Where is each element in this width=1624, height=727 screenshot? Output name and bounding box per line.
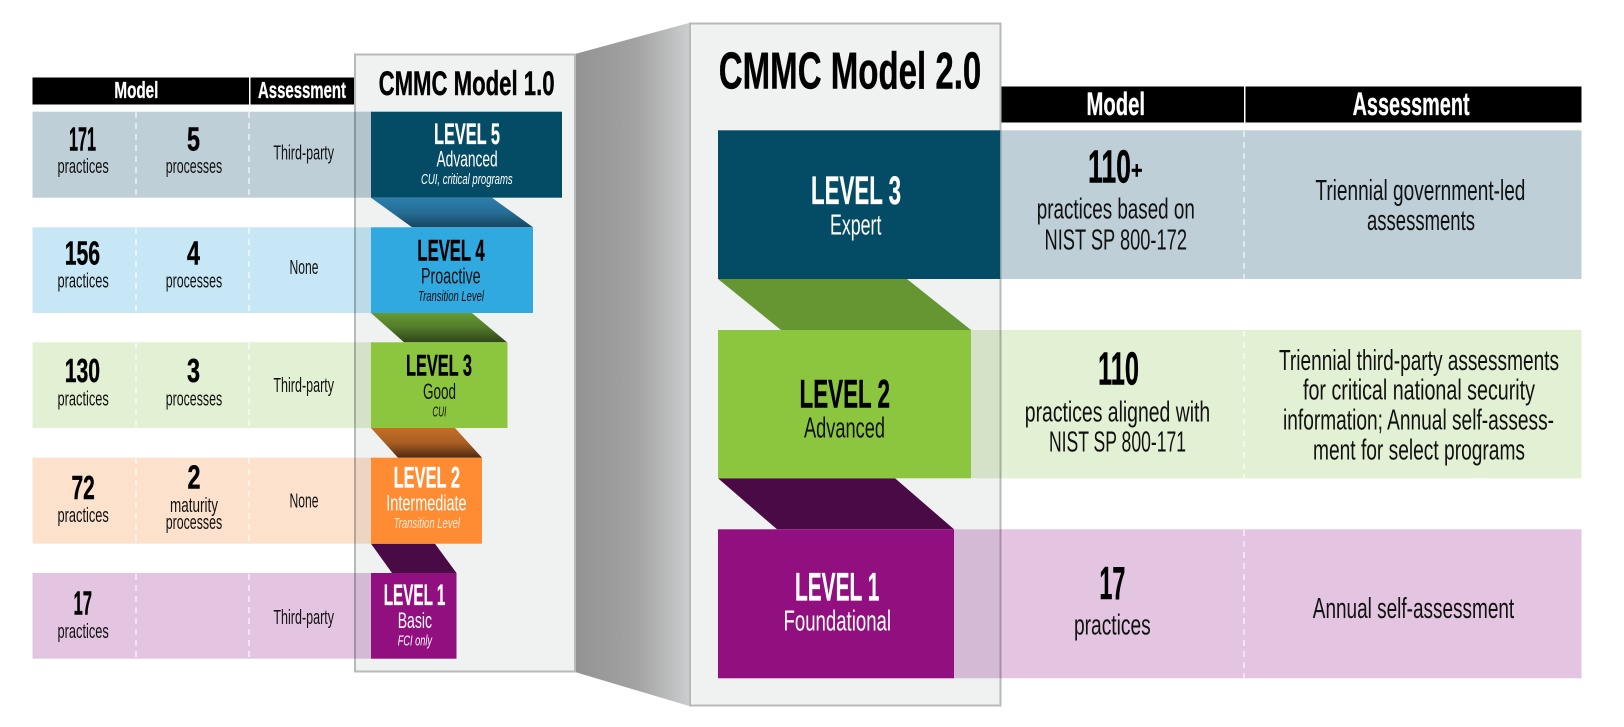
- row: 2.0 level 3 data: assessments: [1367, 205, 1475, 237]
- row: 1.0 level 5 data: processes: [166, 155, 222, 178]
- box: 1.0 level 4 proactive: Proactive: [421, 263, 481, 288]
- row: 1.0 level 4 data: processes: [166, 270, 222, 292]
- row: 2.0 level 1 data: 17: [1099, 557, 1125, 609]
- table header: model 2.0: Model: [1086, 86, 1145, 122]
- table header: model 1.0: Assessment: [258, 77, 346, 103]
- connector: 1.0 level 4 to level 3: [371, 313, 507, 342]
- row: 1.0 level 1 data: Third-party: [273, 606, 334, 629]
- row: 1.0 level 1 data: [32, 573, 372, 659]
- box: 1.0 level 5 advanced: LEVEL 5: [434, 118, 500, 151]
- table header: model 1.0: [32, 77, 354, 104]
- box: 1.0 level 1 basic: LEVEL 1: [384, 579, 445, 612]
- row: 2.0 level 3 data: [1000, 130, 1582, 279]
- box: 1.0 level 2 intermediate: Intermediate: [386, 491, 467, 516]
- row: 1.0 level 5 data: 5: [187, 120, 200, 158]
- box: 2.0 level 1 foundational: LEVEL 1: [795, 566, 879, 610]
- row: 1.0 level 4 data: 156: [65, 234, 100, 271]
- box: 2.0 level 1 foundational: [718, 529, 954, 678]
- box: 2.0 level 2 advanced: LEVEL 2: [800, 372, 890, 416]
- table header: model 1.0: Model: [114, 77, 158, 103]
- box: 1.0 level 1 basic: FCI only: [398, 633, 433, 650]
- box: 2.0 level 3 expert: LEVEL 3: [811, 169, 901, 213]
- row: 1.0 level 2 data: processes: [166, 511, 222, 534]
- row: 1.0 level 5 data: practices: [58, 155, 109, 178]
- connector: 2.0 level 2 to level 1: [718, 478, 954, 529]
- connector: 1.0 level 3 to level 2: [371, 428, 482, 458]
- row: 2.0 level 3 data: practices based on: [1037, 193, 1195, 225]
- box: 2.0 level 3 expert: Expert: [830, 209, 881, 241]
- row: 2.0 level 3 data: 110: [1088, 141, 1131, 193]
- row: 2.0 level 2 data: practices aligned with: [1025, 396, 1210, 428]
- connector: 2.0 level 3 to level 2: [718, 279, 971, 330]
- box: 1.0 level 4 proactive: [371, 227, 533, 313]
- row: 1.0 level 5 data: 171: [69, 121, 96, 158]
- connector: 1.0 level 2 to level 1: [371, 544, 456, 573]
- box: 1.0 level 3 good: LEVEL 3: [406, 350, 472, 382]
- box: 1.0 level 2 intermediate: LEVEL 2: [394, 461, 460, 494]
- row: 1.0 level 2 data: practices: [58, 504, 109, 527]
- table header: model 2.0: [1002, 86, 1582, 122]
- row: 2.0 level 3 data: +: [1131, 158, 1142, 185]
- box: 1.0 level 3 good: CUI: [432, 403, 446, 420]
- row: 1.0 level 3 data: Third-party: [273, 374, 334, 397]
- box: 1.0 level 1 basic: Basic: [398, 608, 432, 633]
- box: 1.0 level 4 proactive: Transition Level: [418, 288, 484, 305]
- box: 1.0 level 2 intermediate: Transition Level: [394, 515, 460, 532]
- row: 2.0 level 3 data: NIST SP 800-172: [1044, 224, 1187, 256]
- box: 1.0 level 5 advanced: [371, 112, 562, 198]
- row: 1.0 level 2 data: 2: [188, 459, 200, 496]
- connector: perspective wall between models: [575, 23, 689, 706]
- box: 1.0 level 4 proactive: LEVEL 4: [417, 235, 485, 268]
- row: 1.0 level 2 data: 72: [72, 469, 95, 506]
- table header: model 2.0: Assessment: [1353, 86, 1470, 122]
- row: 1.0 level 3 data: 130: [65, 352, 100, 389]
- row: 1.0 level 3 data: processes: [166, 388, 222, 410]
- box: 1.0 level 2 intermediate: [371, 458, 482, 544]
- row: 2.0 level 1 data: Annual self-assessment: [1313, 593, 1514, 625]
- row: 1.0 level 1 data: 17: [74, 585, 92, 622]
- row: 2.0 level 2 data: 110: [1098, 343, 1139, 395]
- box: 1.0 level 1 basic: [371, 573, 456, 659]
- box: 2.0 level 2 advanced: Advanced: [804, 412, 885, 444]
- row: 1.0 level 2 data: None: [290, 490, 318, 513]
- row: 2.0 level 1 data: practices: [1074, 610, 1151, 642]
- heading: CMMC Model 2.0: CMMC Model 2.0: [719, 42, 981, 100]
- row: 1.0 level 2 data: [32, 458, 372, 544]
- row: 1.0 level 2 data: maturity: [170, 494, 218, 517]
- row: 1.0 level 4 data: practices: [58, 270, 109, 292]
- box: 2.0 level 3 expert: [718, 130, 1000, 279]
- box: 1.0 level 5 advanced: Advanced: [436, 147, 498, 172]
- row: 1.0 level 4 data: [32, 227, 372, 313]
- row: 1.0 level 1 data: practices: [58, 620, 109, 643]
- box: 2.0 level 1 foundational: Foundational: [784, 606, 891, 638]
- box: 1.0 level 3 good: Good: [423, 379, 456, 404]
- row: 1.0 level 4 data: None: [290, 256, 318, 279]
- row: 1.0 level 5 data: [32, 112, 372, 198]
- row: 1.0 level 5 data: Third-party: [273, 141, 334, 164]
- row: 1.0 level 4 data: 4: [187, 234, 200, 271]
- panel: CMMC Model 1.0: [355, 54, 575, 672]
- box: 2.0 level 2 advanced: [718, 330, 971, 478]
- box: 1.0 level 5 advanced: CUI, critical programs: [421, 171, 513, 188]
- row: 2.0 level 2 data: [971, 330, 1582, 478]
- row: 1.0 level 3 data: [32, 342, 372, 428]
- panel: CMMC Model 2.0: [690, 24, 1000, 706]
- row: 1.0 level 3 data: practices: [58, 388, 109, 410]
- connector: 1.0 level 5 to level 4: [371, 198, 533, 227]
- row: 2.0 level 1 data: [954, 529, 1582, 678]
- row: 1.0 level 3 data: 3: [187, 352, 200, 389]
- row: 2.0 level 2 data: NIST SP 800-171: [1049, 426, 1186, 458]
- box: 1.0 level 3 good: [371, 342, 508, 428]
- heading: CMMC Model 1.0: CMMC Model 1.0: [379, 65, 555, 103]
